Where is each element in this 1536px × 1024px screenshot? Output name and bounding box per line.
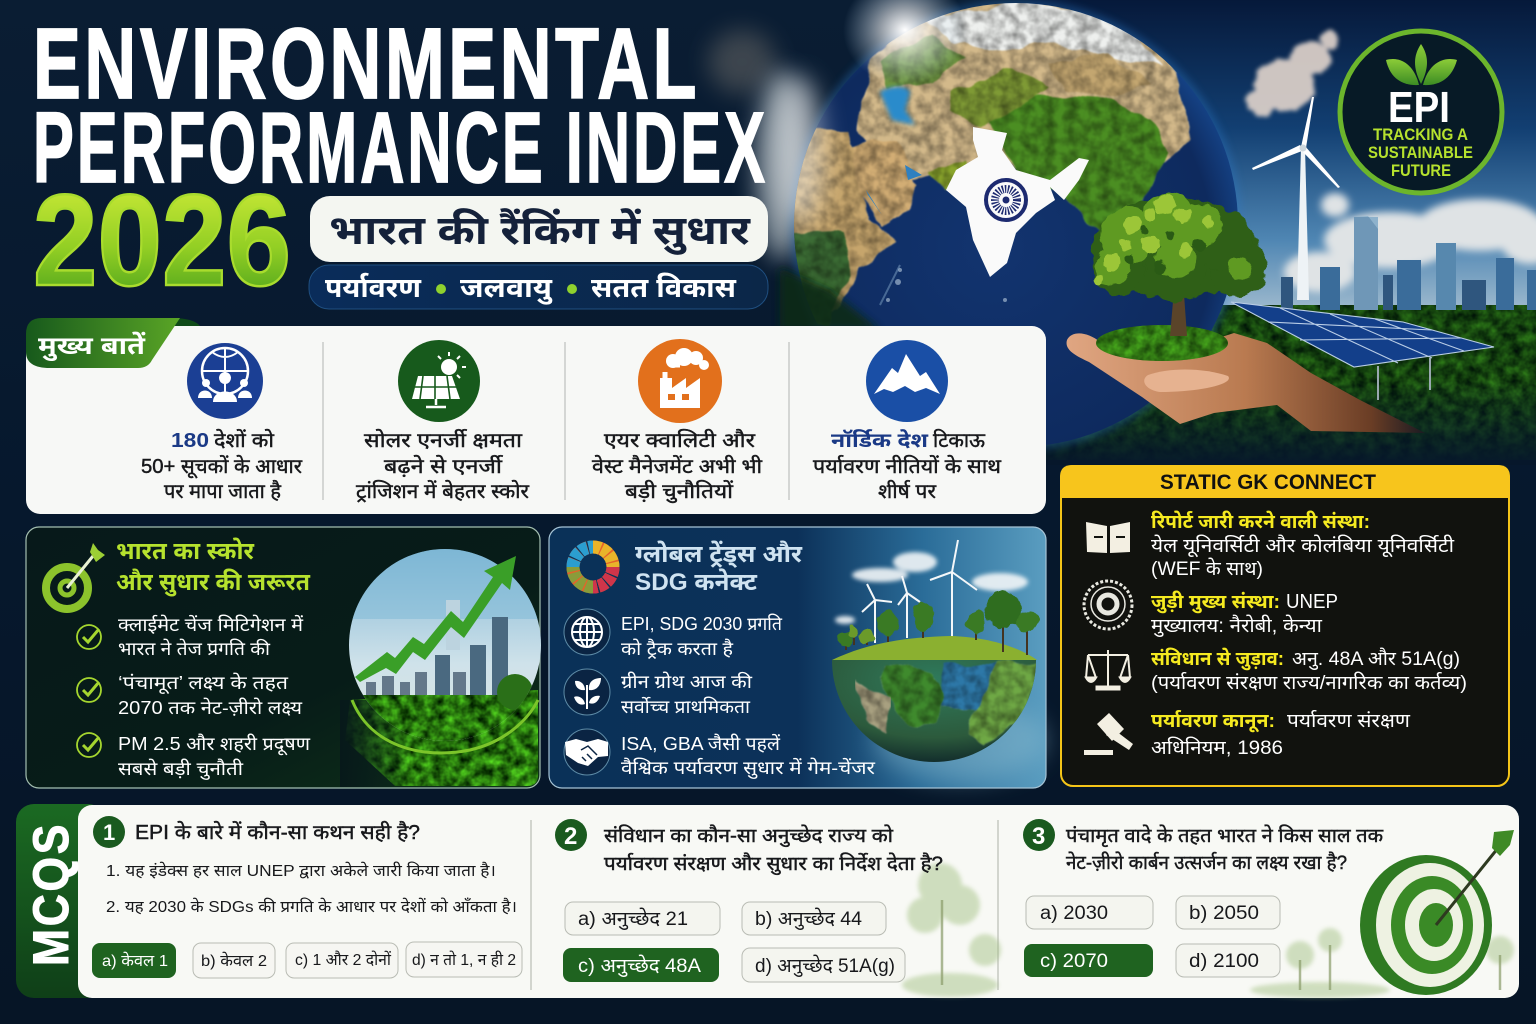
- item: constitution: (पर्यावरण संरक्षण राज्य/नागरिक का कर्तव्य): [1151, 671, 1467, 694]
- question 2: संविधान का कौन-सा अनुच्छेद राज्य को: [604, 824, 894, 848]
- ribbon heading: [26, 318, 200, 368]
- item: green growth: सर्वोच्च प्राथमिकता: [621, 696, 750, 717]
- question 3: a) 2030: [1040, 903, 1108, 924]
- item: UNEP: जुड़ी मुख्य संस्था:: [1151, 591, 1280, 614]
- item: 180 countries: पर मापा जाता है: [164, 478, 281, 503]
- hand: [1067, 333, 1425, 433]
- bullet: PM 2.5: सबसे बड़ी चुनौती: [118, 758, 243, 781]
- theme pill: जलवायु: [460, 273, 553, 304]
- bullet: climate mitigation: [77, 614, 304, 659]
- moss mound: [1096, 325, 1228, 361]
- question 1: b) केवल 2: [201, 951, 267, 970]
- icon: target and arrow: [46, 543, 105, 609]
- question 1: 1: [103, 820, 115, 845]
- item: nordic countries: पर्यावरण नीतियों के साथ: [813, 454, 1002, 478]
- panel: India score: [26, 527, 541, 788]
- item: solar energy: बढ़ने से एनर्जी: [384, 454, 503, 478]
- question 3: b) 2050: [1189, 903, 1259, 924]
- heading: [116, 537, 311, 597]
- wind turbine: [1252, 97, 1340, 300]
- heading: SDG कनेक्ट: [635, 568, 758, 596]
- question 1: a) केवल 1: [102, 951, 168, 970]
- question 1: d) न तो 1, न ही 2: [412, 951, 516, 969]
- year 2026: 2026: [33, 167, 291, 313]
- heading: भारत का स्कोर: [116, 537, 254, 565]
- tree in a cupped hand: [1067, 193, 1425, 433]
- item: air quality: वेस्ट मैनेजमेंट अभी भी: [592, 453, 763, 478]
- icon: bullseye with arrow: [1360, 830, 1514, 995]
- icon: SDG wheel: [573, 547, 613, 587]
- globe with India: [776, 0, 1242, 451]
- item: solar energy: ट्रांजिशन में बेहतर स्कोर: [356, 479, 530, 503]
- bullet: PM 2.5: PM 2.5 और शहरी प्रदूषण: [118, 734, 311, 756]
- continents: [785, 0, 1190, 325]
- item: 180 countries: 180: [171, 430, 209, 452]
- question 1: c) 1 और 2 दोनों: [295, 950, 392, 969]
- question 3: [1023, 819, 1383, 977]
- item: report: (WEF के साथ): [1151, 557, 1263, 580]
- item: nordic countries: टिकाऊ: [933, 428, 985, 452]
- item: ISA GBA: वैश्विक पर्यावरण सुधार में गेम-चेंजर: [621, 757, 876, 780]
- half globe with landscape: [832, 540, 1046, 780]
- item: UNEP: मुख्यालय: नैरोबी, केन्या: [1151, 614, 1323, 638]
- item: constitution: [1085, 647, 1467, 694]
- question 3: नेट-ज़ीरो कार्बन उत्सर्जन का लक्ष्य रखा है?: [1066, 851, 1347, 874]
- question 2: 2: [564, 823, 577, 850]
- MCQS vertical label: MCQS: [23, 822, 79, 966]
- theme pill: सतत विकास: [591, 273, 737, 303]
- item: green growth: [564, 669, 752, 717]
- subtitle pill: भारत की रैंकिंग में सुधार: [329, 208, 752, 255]
- item: nordic countries: [813, 340, 1002, 503]
- city growth illustration: [340, 549, 541, 787]
- city skyline: [1281, 216, 1536, 310]
- subtitle pill: [310, 196, 768, 262]
- EPI badge: EPI: [1388, 83, 1450, 132]
- ashoka chakra: [986, 180, 1026, 220]
- solar panels: [1231, 302, 1494, 400]
- item: environment law: अधिनियम, 1986: [1151, 737, 1283, 759]
- item: EPI SDG tracking: EPI, SDG 2030 प्रगति: [621, 614, 783, 634]
- map of India: [946, 127, 1089, 277]
- item: air quality: [592, 339, 763, 504]
- bullet: climate mitigation: भारत ने तेज प्रगति की: [118, 638, 270, 659]
- bullet: panchamrit: [77, 672, 303, 718]
- item: ISA GBA: [564, 729, 876, 780]
- background: sky, clouds and forest: [708, 0, 1536, 465]
- item: report: रिपोर्ट जारी करने वाली संस्था:: [1151, 510, 1370, 533]
- question 2: a) अनुच्छेद 21: [578, 907, 688, 931]
- item: constitution: अनु. 48A और 51A(g): [1292, 648, 1460, 671]
- question 1: 1. यह इंडेक्स हर साल UNEP द्वारा अकेले जारी किया जाता है।: [106, 861, 496, 880]
- sun glare: [843, 0, 967, 85]
- item: environment law: [1084, 709, 1410, 759]
- forest in lower left: [780, 268, 880, 330]
- item: report: येल यूनिवर्सिटी और कोलंबिया यूनिवर्सिटी: [1151, 534, 1455, 558]
- EPI badge: SUSTAINABLE: [1368, 143, 1473, 162]
- item: 180 countries: [141, 343, 303, 503]
- item: constitution: संविधान से जुड़ाव:: [1151, 647, 1284, 671]
- item: ISA GBA: ISA, GBA जैसी पहलें: [621, 733, 781, 754]
- question 3: c) 2070: [1040, 951, 1108, 972]
- question 3: d) 2100: [1189, 951, 1259, 972]
- item: green growth: ग्रीन ग्रोथ आज की: [621, 671, 752, 692]
- question 2: d) अनुच्छेद 51A(g): [755, 954, 895, 978]
- icon: leaves: [1386, 44, 1457, 85]
- item: UNEP: UNEP: [1286, 591, 1338, 613]
- item: solar energy: [356, 340, 530, 503]
- EPI badge: TRACKING A: [1373, 125, 1468, 144]
- heading: और सुधार की जरूरत: [116, 568, 311, 597]
- heading: ग्लोबल ट्रेंड्स और: [635, 540, 802, 568]
- trunk: [1150, 262, 1205, 336]
- bullet: panchamrit: ‘पंचामूत’ लक्ष्य के तहत: [118, 672, 289, 695]
- bullet: panchamrit: 2070 तक नेट-ज़ीरो लक्ष्य: [118, 697, 303, 718]
- item: EPI SDG tracking: को ट्रैक करता है: [621, 638, 733, 659]
- item: UNEP: [1084, 581, 1338, 638]
- bullet: PM 2.5: [77, 733, 311, 781]
- panel: global trends and SDG: [549, 527, 1046, 788]
- scenery: trees: [902, 863, 1514, 998]
- item: 180 countries: 50+ सूचकों के आधार: [141, 454, 303, 479]
- title: PERFORMANCE INDEX: [33, 92, 768, 204]
- item: 180 countries: देशों को: [214, 428, 275, 452]
- theme pill: [309, 265, 768, 309]
- item: nordic countries: शीर्ष पर: [878, 479, 937, 503]
- EPI badge: FUTURE: [1391, 161, 1451, 180]
- question 1: 2. यह 2030 के SDGs की प्रगति के आधार पर देशों को आँकता है।: [106, 897, 517, 916]
- heading: [635, 540, 802, 596]
- question 2: c) अनुच्छेद 48A: [578, 954, 701, 978]
- question 1: [92, 816, 522, 978]
- title: ENVIRONMENTAL: [33, 8, 700, 120]
- title: [33, 8, 768, 204]
- question 2: b) अनुच्छेद 44: [755, 907, 862, 931]
- theme pill: पर्यावरण: [325, 272, 422, 303]
- panel: key points: [26, 318, 1046, 514]
- crown: [1092, 193, 1267, 302]
- question 2: पर्यावरण संरक्षण और सुधार का निर्देश देता है?: [604, 852, 943, 876]
- item: environment law: पर्यावरण संरक्षण: [1287, 709, 1410, 732]
- question 1: EPI के बारे में कौन-सा कथन सही है?: [135, 819, 420, 844]
- item: EPI SDG tracking: [564, 609, 783, 659]
- panel: static GK connect: [1060, 465, 1510, 786]
- growth arrow: [355, 556, 516, 682]
- item: nordic countries: नॉर्डिक देश: [831, 428, 929, 452]
- ribbon heading: मुख्य बातें: [38, 331, 146, 361]
- item: report: [1086, 510, 1455, 580]
- question 3: 3: [1032, 823, 1045, 850]
- question 2: [555, 819, 943, 982]
- panel: MCQs: [16, 804, 1519, 998]
- question 3: पंचामृत वादे के तहत भारत ने किस साल तक: [1066, 824, 1383, 848]
- item: air quality: बड़ी चुनौतियों: [625, 479, 734, 504]
- item: solar energy: सोलर एनर्जी क्षमता: [364, 428, 523, 452]
- EPI badge: [1340, 31, 1502, 193]
- panel: static GK connect: STATIC GK CONNECT: [1160, 471, 1376, 494]
- bullet: climate mitigation: क्लाईमेट चेंज मिटिगेशन में: [118, 614, 304, 635]
- item: environment law: पर्यावरण कानून:: [1151, 709, 1275, 733]
- item: air quality: एयर क्वालिटी और: [604, 428, 756, 452]
